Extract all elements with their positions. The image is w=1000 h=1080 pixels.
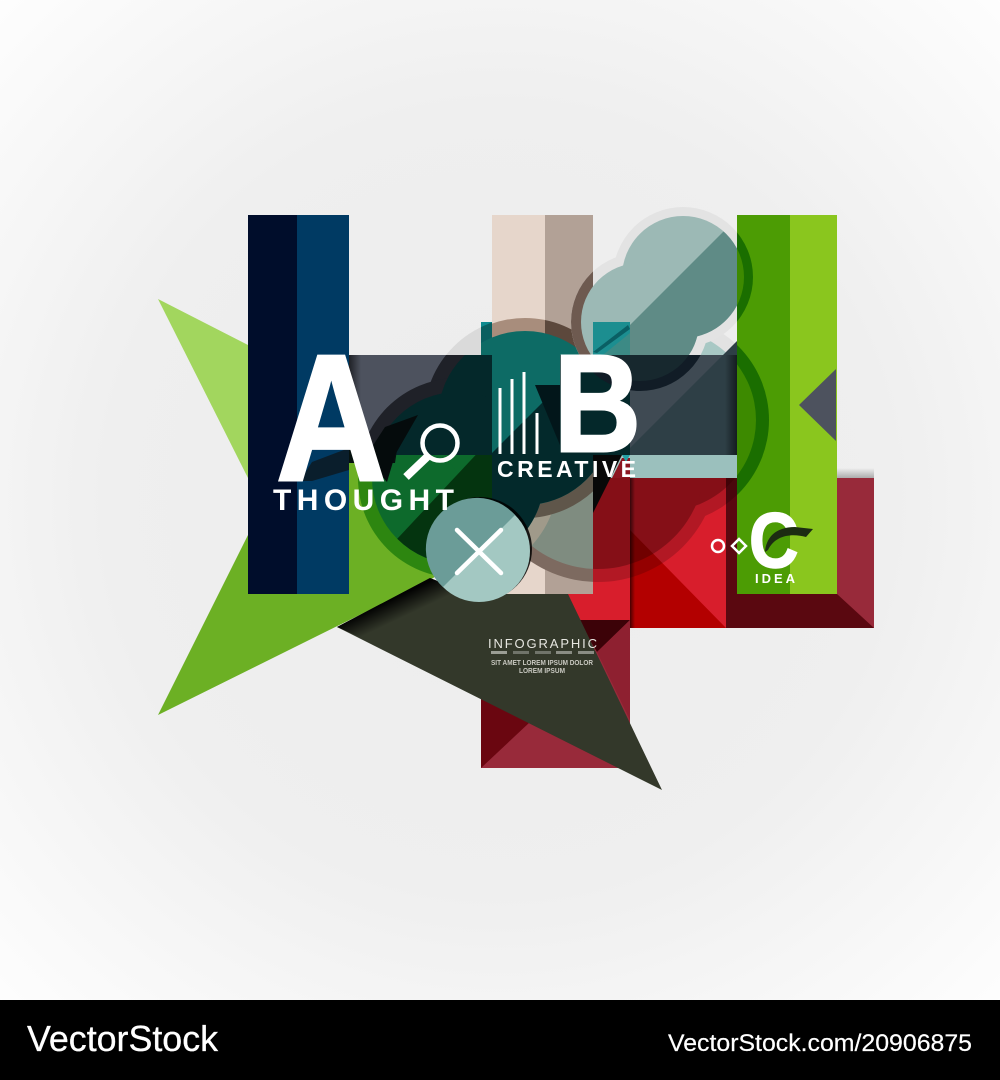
panel: teal square [481, 322, 630, 455]
teal sliver over cloud [593, 322, 630, 355]
band: left dark band [349, 355, 492, 455]
footer bar [0, 1000, 1000, 1080]
panel: lower red block [481, 620, 630, 768]
text block: INFOGRAPHIC [488, 636, 597, 675]
text block: INFOGRAPHIC: LOREM IPSUM [519, 666, 565, 675]
wedge beside beige bar [593, 455, 630, 513]
cloud: right large cloud [529, 334, 737, 628]
heading: letter C: C [749, 496, 799, 584]
label: IDEA: IDEA [755, 571, 796, 586]
panel: green bar [737, 215, 837, 594]
heading: CREATIVE: CREATIVE [497, 456, 636, 482]
icon: x circle button [426, 497, 532, 602]
icon: dark swoosh on C [765, 527, 813, 552]
icon: bar lines [498, 372, 538, 454]
heading: letter B: B [554, 327, 641, 481]
panel: navy bar [248, 215, 349, 594]
text block: INFOGRAPHIC: SIT AMET LOREM IPSUM DOLOR [491, 658, 593, 667]
icon: magnifying glass [406, 426, 458, 477]
heading: THOUGHT: THOUGHT [273, 484, 454, 517]
medium green arrow shape [158, 455, 492, 715]
footer bar: VectorStock [27, 1018, 219, 1059]
cloud: left large cloud [446, 318, 593, 546]
panel: right red block [568, 468, 874, 628]
panel: dark olive triangle [337, 578, 662, 790]
icon: grey triangle on green bar [799, 369, 836, 441]
band: right dark band [560, 341, 737, 455]
footer bar: VectorStock.com/20906875 [668, 1030, 972, 1057]
green region inside cloud [358, 455, 492, 575]
cloud: top teal cloud [571, 207, 737, 355]
letter A shadow [300, 448, 349, 481]
text block: INFOGRAPHIC: INFOGRAPHIC [488, 636, 597, 651]
icon: circle and diamond [712, 539, 746, 553]
shadow strip and dark arrow behind letter A [349, 415, 418, 482]
heading: letter A: A [276, 318, 386, 519]
panel: light teal strip [630, 455, 737, 478]
panel: beige bar [492, 215, 593, 594]
light green triangle [158, 299, 248, 478]
